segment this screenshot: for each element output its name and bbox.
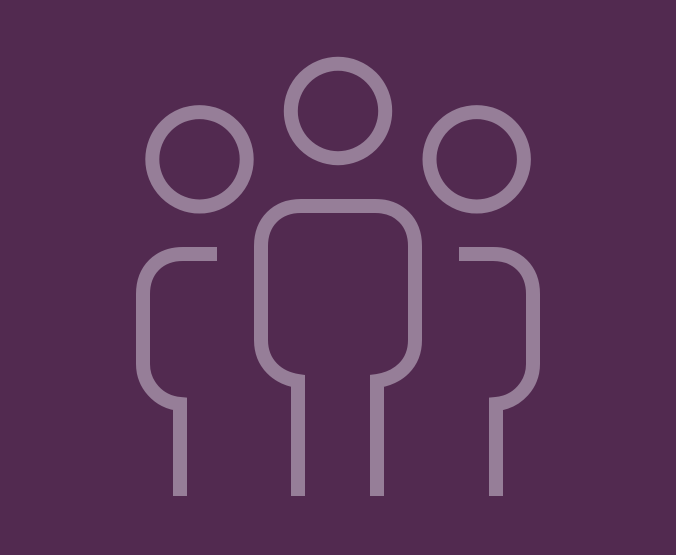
icon: left person — [143, 112, 247, 496]
icon: right person — [430, 112, 533, 496]
icon: center person — [261, 64, 415, 496]
